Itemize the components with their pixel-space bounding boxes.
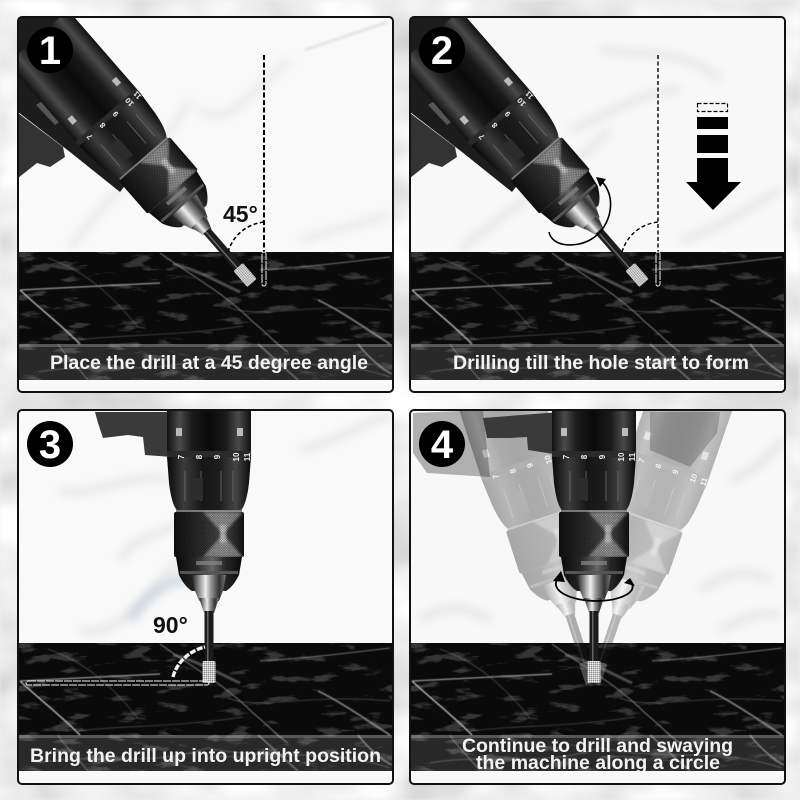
number badge 1: 1: [39, 29, 61, 73]
dashed angle arc: [228, 222, 264, 252]
drill grip: [95, 412, 172, 457]
downward pressure arrow: [686, 104, 741, 210]
number badge 2: [419, 27, 465, 73]
angle label: 90°: [153, 612, 188, 638]
upright drill: [552, 411, 636, 683]
black marble slab with caption band: [18, 252, 393, 380]
panel 4 frame: [410, 410, 785, 784]
marble wall: [18, 17, 393, 392]
number badge 4: [419, 421, 465, 467]
dashed angle arc: [622, 222, 658, 252]
drill at 45 degrees: [19, 18, 256, 287]
step 2 caption: Drilling till the hole start to form: [453, 352, 749, 374]
panel: step 2: [399, 10, 785, 392]
circular sway arrow: [553, 571, 635, 601]
marble wall: [18, 410, 393, 784]
black marble slab with caption band: [410, 252, 785, 380]
angle label: 45°: [223, 201, 258, 227]
panel 2 frame: [410, 17, 785, 392]
step 4 caption: [462, 738, 732, 771]
number badge 4: 4: [431, 423, 454, 467]
rotation arrow: [549, 177, 611, 245]
drill at 45 degrees: [411, 18, 648, 287]
panel 1 frame: [18, 17, 393, 392]
step 1 caption: Place the drill at a 45 degree angle: [50, 352, 368, 374]
left ghost grip: [413, 410, 490, 477]
number badge 2: 2: [431, 29, 453, 73]
horizontal chained reference line: [26, 681, 209, 685]
left swaying ghost drill: [460, 411, 592, 685]
drill rear body and grip: [411, 18, 523, 192]
number badge 3: [27, 421, 73, 467]
panel 3 frame: [18, 410, 393, 784]
panel: step 4: [411, 411, 784, 783]
right swaying ghost drill: [594, 411, 732, 685]
chained angle arc: [173, 647, 205, 677]
drill grip: [483, 412, 552, 454]
number badge 3: 3: [39, 423, 61, 467]
dashed vertical reference line: [262, 55, 266, 286]
right ghost grip: [650, 412, 720, 467]
number badge 1: [27, 27, 73, 73]
panel: step 3: [19, 411, 392, 783]
marble wall: [410, 410, 785, 784]
upright drill: [167, 411, 251, 683]
step 4 caption: Continue to drill and swaying: [462, 735, 733, 757]
step 4 caption: the machine along a circle: [476, 752, 720, 774]
drill rear body and grip: [19, 18, 131, 192]
step 3 caption: Bring the drill up into upright position: [30, 745, 381, 767]
dashed vertical reference line: [656, 55, 660, 286]
black marble slab with caption band: [410, 643, 785, 771]
marble wall: [410, 17, 785, 392]
black marble slab with caption band: [18, 643, 393, 771]
panel: step 1: [7, 10, 393, 392]
